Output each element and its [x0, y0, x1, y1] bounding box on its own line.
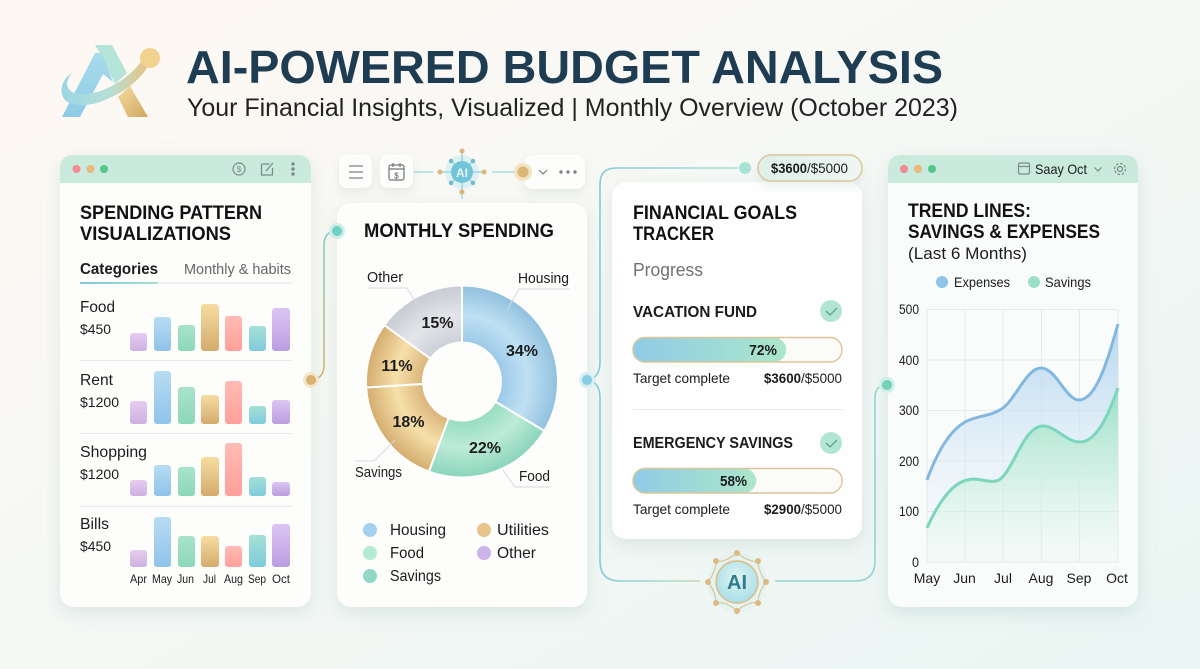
row: shopping: $1200: [80, 466, 119, 482]
y axis labels: [899, 302, 919, 570]
y axis labels: 500: [899, 302, 919, 317]
calendar button: [380, 155, 413, 188]
donut labels with leaders: [355, 270, 570, 487]
goal: emergency savings: EMERGENCY SAVINGS: [633, 435, 793, 452]
x axis labels: Sep: [1067, 570, 1092, 586]
donut legend: Savings: [390, 568, 441, 585]
chart legend: Expenses: [954, 274, 1010, 290]
donut legend: Utilities: [497, 522, 549, 539]
goal: vacation fund: Target complete: [633, 370, 730, 386]
menu button: [339, 155, 372, 188]
row: food: [80, 299, 290, 351]
y axis labels: 400: [899, 353, 919, 368]
donut percentages: 15%: [421, 315, 454, 332]
tabs: Categories: [80, 261, 158, 278]
panel: spending pattern visualizations: [60, 155, 311, 607]
toolbar icons: $: [237, 165, 242, 174]
month labels: Aug: [224, 572, 243, 586]
subtitle: Your Financial Insights, Visualized | Monthly Overview (October 2023): [187, 94, 958, 122]
x axis labels: Aug: [1029, 570, 1053, 586]
heading: [908, 200, 1100, 263]
goal: vacation fund: $3600: [764, 370, 801, 386]
connector node: monthly spending heading: [329, 223, 345, 239]
progress label: Progress: [633, 260, 703, 280]
connector node: food panel edge: [303, 372, 319, 388]
x axis labels: Jul: [994, 570, 1012, 586]
amount pill: [758, 155, 862, 181]
line chart: [927, 310, 1118, 562]
y axis labels: 0: [912, 555, 919, 570]
row: rent: Rent: [80, 372, 114, 389]
y axis labels: 200: [899, 454, 919, 469]
toolbar icons: [233, 163, 294, 175]
heading: MONTHLY SPENDING: [364, 220, 554, 242]
expenses line: [927, 324, 1118, 480]
goal: vacation fund: /$5000: [801, 370, 842, 386]
row: food: $450: [80, 321, 111, 337]
donut chart: [366, 286, 558, 477]
goal: vacation fund: VACATION FUND: [633, 304, 757, 321]
x axis labels: Jun: [953, 570, 976, 586]
heading: TRACKER: [633, 223, 714, 245]
panel: trend lines: [888, 155, 1138, 607]
goal: emergency savings: $2900: [764, 501, 801, 517]
donut percentages: 18%: [392, 414, 425, 431]
row: bills: $450: [80, 538, 111, 554]
month labels: Jul: [203, 572, 216, 586]
donut labels with leaders: Other: [367, 270, 403, 286]
window dots: [900, 165, 936, 173]
donut percentages: [381, 315, 538, 457]
x axis labels: May: [914, 570, 940, 586]
connector node: monthly spending edge: [579, 372, 595, 388]
connector: panel 1 to panel 2: [311, 231, 337, 380]
row: shopping: Shopping: [80, 444, 147, 461]
savings area: [927, 388, 1118, 562]
logo: AI monogram: [61, 45, 160, 117]
goal: vacation fund: [633, 300, 842, 386]
goal: vacation fund: 72%: [749, 342, 777, 359]
donut percentages: 22%: [469, 440, 501, 457]
chart legend: [936, 274, 1091, 290]
x axis labels: [914, 570, 1128, 586]
donut labels with leaders: Savings: [355, 465, 402, 481]
row: bills: Bills: [80, 516, 109, 533]
month labels: Sep: [248, 572, 266, 586]
heading: [633, 202, 797, 245]
donut legend: [363, 522, 549, 585]
settings icon: [1114, 164, 1126, 174]
goal: emergency savings: Target complete: [633, 501, 730, 517]
date selector: Saay Oct: [1035, 161, 1087, 177]
connector: monthly spending to AI badge: [587, 380, 700, 581]
gold node: [514, 163, 532, 181]
month labels: Apr: [130, 572, 147, 586]
row: rent: $1200: [80, 394, 119, 410]
heading: SPENDING PATTERN: [80, 202, 262, 224]
panel: monthly spending: [337, 203, 587, 607]
donut legend: Other: [497, 545, 537, 562]
heading: TREND LINES:: [908, 200, 1031, 222]
window dots: [72, 165, 108, 173]
tabs: [80, 261, 292, 284]
heading: VISUALIZATIONS: [80, 223, 231, 245]
month labels: May: [152, 572, 172, 586]
connector: monthly spending to goals tracker: [587, 162, 751, 380]
AI hub node: AI: [456, 166, 468, 180]
donut labels with leaders: Housing: [518, 271, 569, 287]
row: bills: [80, 516, 290, 567]
donut labels with leaders: Food: [519, 469, 550, 485]
month labels: [130, 572, 291, 586]
donut legend: Housing: [390, 522, 446, 539]
y axis labels: 300: [899, 403, 919, 418]
goal: emergency savings: 58%: [720, 473, 747, 490]
tabs: Monthly & habits: [184, 261, 291, 278]
AI badge: AI: [727, 572, 747, 594]
x axis labels: Oct: [1106, 570, 1128, 586]
AI badge: [705, 550, 769, 614]
row: shopping: [80, 443, 290, 496]
expenses area: [927, 324, 1118, 528]
heading: SAVINGS & EXPENSES: [908, 221, 1100, 243]
title: AI-POWERED BUDGET ANALYSIS: [186, 41, 943, 93]
row: rent: [80, 371, 290, 424]
heading: FINANCIAL GOALS: [633, 202, 797, 224]
donut percentages: 34%: [506, 343, 538, 360]
heading: [80, 202, 262, 245]
heading: (Last 6 Months): [908, 244, 1027, 263]
month labels: Jun: [177, 572, 194, 586]
goal: emergency savings: [633, 432, 842, 517]
amount pill: /$5000: [807, 160, 848, 176]
amount pill: $3600: [771, 160, 807, 176]
dropdown button: [524, 155, 585, 189]
goal: emergency savings: /$5000: [801, 501, 842, 517]
connector node: trend panel edge: [879, 377, 895, 393]
AI hub node: [414, 148, 516, 199]
row: food: Food: [80, 299, 115, 316]
donut percentages: 11%: [381, 358, 413, 375]
y axis labels: 100: [899, 504, 919, 519]
savings line: [927, 388, 1118, 528]
donut legend: Food: [390, 545, 424, 562]
month labels: Oct: [272, 572, 291, 586]
chart legend: Savings: [1045, 274, 1091, 290]
panel: financial goals tracker: [612, 182, 862, 539]
calendar button: $: [394, 172, 399, 180]
date selector: [1018, 161, 1102, 177]
connector: AI badge to trend lines: [775, 385, 887, 581]
